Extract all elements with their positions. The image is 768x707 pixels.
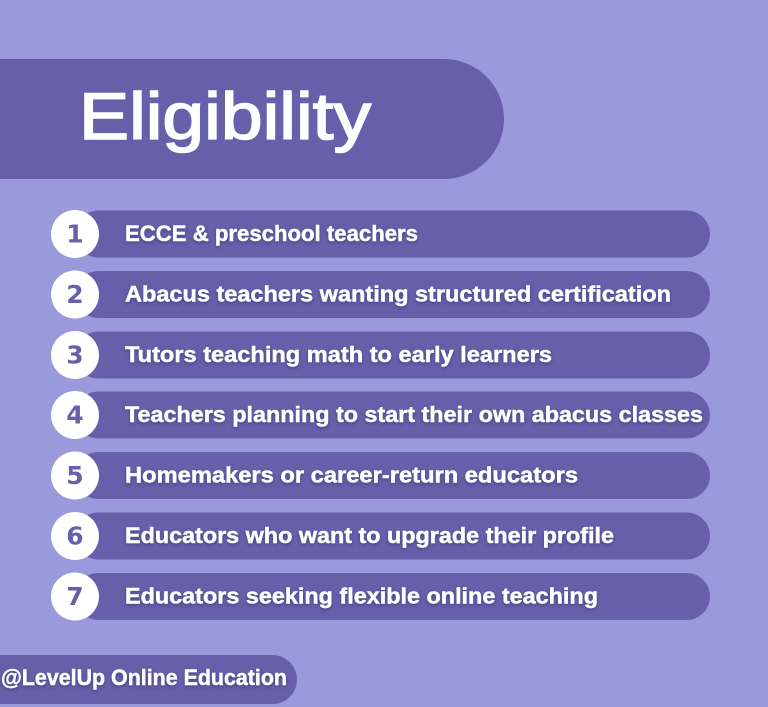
title: Eligibility: [79, 79, 371, 153]
list row 5: [51, 452, 710, 500]
list row 1: 1: [66, 220, 84, 248]
list row 4: Teachers planning to start their own abacus classes: [125, 402, 703, 427]
list row 4: [51, 391, 710, 439]
list row 7: 7: [66, 582, 84, 611]
footer handle pill: [0, 655, 297, 704]
list row 4: 4: [66, 400, 84, 430]
list row 3: [51, 331, 710, 379]
list row 6: [51, 512, 710, 560]
list row 5: 5: [66, 461, 84, 490]
list row 3: Tutors teaching math to early learners: [125, 342, 552, 367]
list row 1: [51, 210, 710, 258]
list row 6: Educators who want to upgrade their profile: [125, 523, 614, 548]
list row 7: Educators seeking flexible online teaching: [125, 584, 598, 608]
list row 2: [51, 270, 710, 318]
list row 2: 2: [66, 280, 84, 309]
title banner: [0, 59, 504, 179]
list row 2: Abacus teachers wanting structured certification: [125, 282, 671, 306]
footer handle pill: @LevelUp Online Education: [1, 665, 287, 690]
list row 7: [51, 572, 710, 620]
list row 6: 6: [66, 522, 84, 550]
list row 1: ECCE & preschool teachers: [125, 221, 418, 246]
list row 3: 3: [66, 340, 84, 370]
list row 5: Homemakers or career-return educators: [125, 462, 578, 488]
